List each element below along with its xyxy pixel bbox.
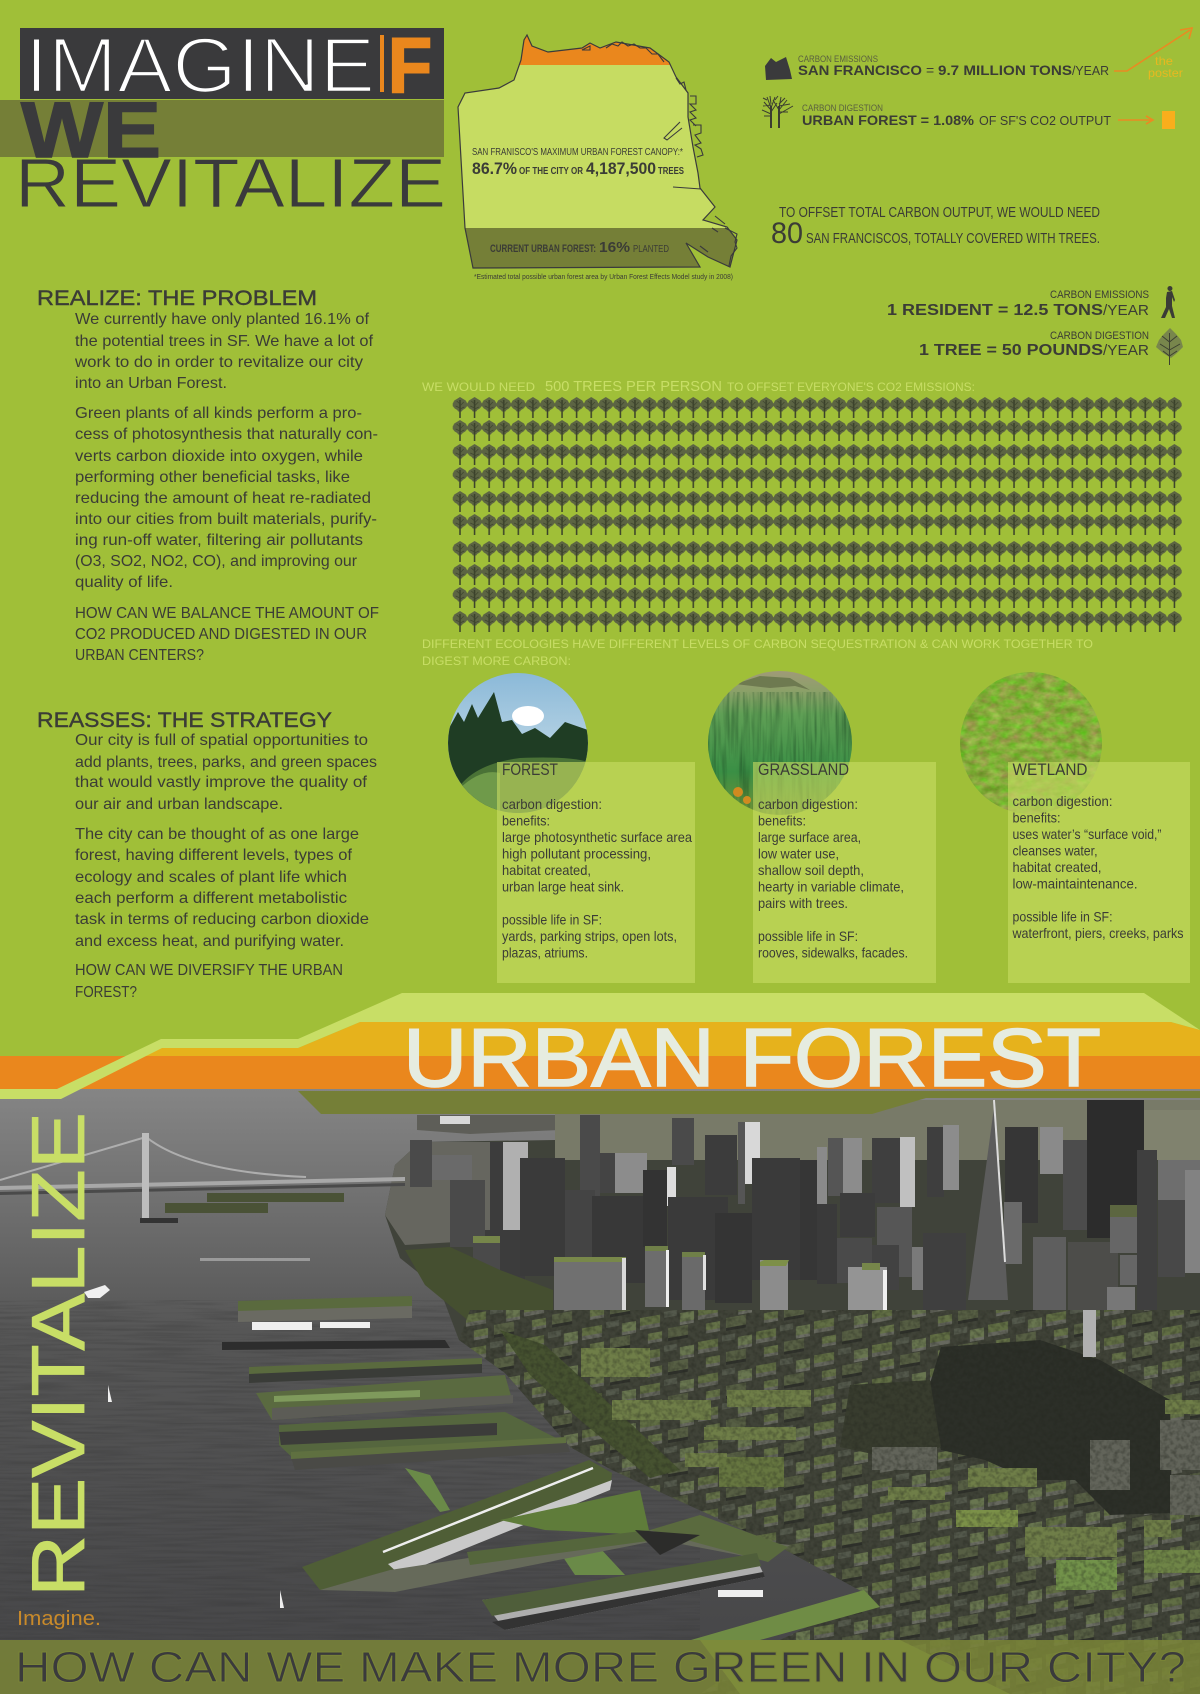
panel body text: high pollutant processing,: [502, 846, 651, 862]
banner: Urban Forest: [0, 993, 1200, 1114]
panel body text: [502, 796, 692, 960]
body text: realize: (O3, SO2, NO2, CO), and improving our: [75, 553, 358, 570]
olive band: [0, 1640, 1200, 1694]
digestion value: [802, 112, 1111, 128]
digestion caption: CARBON DIGESTION: [802, 103, 883, 114]
body text: reasses: our air and urban landscape.: [75, 796, 283, 813]
chart: grid of 500 trees: [453, 397, 1182, 632]
heading: reasses: REASSES: THE STRATEGY: [37, 709, 332, 732]
the poster label: poster: [1148, 66, 1183, 80]
body text: realize: We currently have only planted 16.1% of: [75, 311, 370, 328]
icon: San Francisco silhouette: [765, 57, 792, 80]
title word F: F: [388, 21, 432, 109]
icon: bare trees: [762, 96, 793, 128]
body text: reasses: each perform a different metabolistic: [75, 890, 347, 907]
panel body text: large photosynthetic surface area: [502, 829, 692, 845]
title dark box: [20, 28, 444, 99]
panel: wetland: [1008, 760, 1190, 983]
panel body text: pairs with trees.: [758, 895, 848, 911]
panel body text: urban large heat sink.: [502, 878, 624, 894]
olive band behind WE: [0, 100, 444, 157]
pale rooftops: [872, 1420, 1200, 1515]
heading: different ecologies: [422, 637, 1093, 668]
city land base: [385, 1114, 1200, 1694]
caption: Imagine: Imagine.: [17, 1608, 101, 1630]
body text: reasses: ecology and scales of plant life which: [75, 869, 347, 886]
map stat: 86.7 percent: OF THE CITY OR: [519, 166, 584, 177]
body text: realize: performing other beneficial tasks, like: [75, 469, 350, 486]
body text: reasses: The city can be thought of as one large: [75, 826, 359, 843]
stat: 1 tree: CARBON DIGESTION: [1050, 330, 1149, 342]
panel body text: rooves, sidewalks, facades.: [758, 944, 908, 960]
emissions value: [798, 62, 1109, 78]
map stat: current urban forest: CURRENT URBAN FOREST:: [490, 243, 596, 255]
panel body text: cleanses water,: [1012, 842, 1098, 858]
arrow to small rectangle: [1118, 116, 1153, 124]
stat: San Francisco carbon emissions: [765, 28, 1192, 80]
callout: 80 San Franciscos: SAN FRANCISCOS, TOTALLY COVERED WITH TREES.: [806, 230, 1100, 247]
panel body text: hearty in variable climate,: [758, 878, 904, 894]
body text: reasses: FOREST?: [75, 984, 137, 1001]
body text: realize: ing run-off water, filtering air pollutants: [75, 532, 363, 549]
map footnote: *Estimated total possible urban forest area by Urban Forest Effects Model study in 2008): [474, 274, 733, 281]
panel body text: benefits:: [502, 812, 550, 828]
orange stripe: [0, 1056, 1200, 1089]
panel body text: low-maintaintenance.: [1012, 876, 1138, 892]
vertical title: Revitalize: REVITALIZE: [16, 1112, 100, 1597]
map stat: current urban forest: 16%: [599, 239, 630, 256]
stat: 1 tree: /YEAR: [1103, 342, 1149, 359]
panel body text: carbon digestion:: [758, 796, 858, 812]
stat: 1 tree: 1 TREE = 50 POUNDS: [919, 342, 1103, 359]
text column: realize the problem: [37, 287, 379, 664]
wetland patches in water: [405, 1468, 625, 1575]
emissions value: /YEAR: [1072, 63, 1109, 78]
bay water: [0, 1089, 1200, 1694]
panel body text: carbon digestion:: [502, 796, 602, 812]
lit low towers: [554, 1258, 626, 1310]
emissions value: SAN FRANCISCO: [798, 62, 922, 78]
shaded trees west of hill: [840, 1380, 941, 1460]
panel body text: waterfront, piers, creeks, parks: [1012, 925, 1184, 941]
map pier details: [582, 42, 737, 266]
panel body text: plazas, atriums.: [502, 944, 588, 960]
city haze behind towers: [555, 1100, 1200, 1160]
body text: reasses: Our city is full of spatial opportunities to: [75, 732, 368, 749]
body text: reasses: HOW CAN WE DIVERSIFY THE URBAN: [75, 962, 343, 979]
body text: realize: into our cities from built materials, purify-: [75, 511, 377, 528]
body text: realize: URBAN CENTERS?: [75, 647, 204, 664]
Coit tower: [1083, 1310, 1096, 1357]
panel title: WETLAND: [1012, 760, 1088, 779]
photo: aerial view of San Francisco waterfront with green roofs: [0, 1089, 1200, 1694]
piers along the waterfront: [222, 1296, 570, 1470]
map: San Francisco urban forest canopy: [450, 30, 750, 281]
title word WE: WE: [21, 85, 161, 174]
the poster label: [1148, 54, 1183, 80]
panel background: [497, 762, 695, 983]
arrow to the poster: [1114, 28, 1192, 71]
body text: reasses: and excess heat, and purifying water.: [75, 933, 344, 950]
olive stripe: [298, 1091, 1200, 1114]
banner title: URBAN FOREST: [403, 1011, 1101, 1104]
panel body text: low water use,: [758, 846, 839, 862]
bottom band with question: [0, 1640, 1200, 1694]
body text: reasses: task in terms of reducing carbon dioxide: [75, 911, 369, 928]
body text: reasses: [75, 732, 377, 1001]
stat: 1 tree: [919, 328, 1183, 365]
heading: 500 trees per person: 500 TREES PER PERSON: [545, 378, 722, 395]
panel body text: habitat created,: [502, 862, 591, 878]
stat: urban forest carbon digestion: [762, 96, 1175, 129]
water ripples: [0, 1300, 700, 1640]
heading: different ecologies: DIFFERENT ECOLOGIES HAVE DIFFERENT LEVELS OF CARBON SEQUESTRATION & CAN WORK TOGETHER TO: [422, 637, 1093, 651]
map zones clipped to city shape: [458, 36, 736, 268]
map stat: 86.7 percent: [472, 159, 684, 178]
map label: maximum canopy: SAN FRANISCO'S MAXIMUM URBAN FOREST CANOPY:*: [472, 147, 683, 158]
panel body text: shallow soil depth,: [758, 862, 864, 878]
digestion value: OF SF'S CO2 OUTPUT: [979, 113, 1111, 128]
body text: realize: cess of photosynthesis that naturally con-: [75, 426, 378, 443]
callout: 80 San Franciscos: [771, 204, 1100, 250]
map stat: 86.7 percent: 86.7%: [472, 159, 517, 178]
Transamerica pyramid: [968, 1100, 1008, 1300]
body text: realize: work to do in order to revitalize our city: [74, 354, 363, 371]
the poster label: the: [1155, 54, 1173, 68]
waterfront park trees: [405, 1247, 553, 1322]
body text: reasses: that would vastly improve the quality of: [75, 774, 368, 791]
stat: 1 resident: [887, 286, 1175, 319]
stat: 1 resident: CARBON EMISSIONS: [1050, 289, 1149, 301]
title word REVITALIZE: REVITALIZE: [15, 144, 446, 222]
body text: realize: verts carbon dioxide into oxygen, while: [75, 448, 363, 465]
body text: realize: CO2 PRODUCED AND DIGESTED IN OUR: [75, 626, 367, 643]
text column: reasses the strategy: [37, 709, 377, 1001]
large V-shaped pier with green roof: [302, 1460, 790, 1592]
digestion value: URBAN FOREST = 1.08%: [802, 112, 975, 128]
body text: reasses: add plants, trees, parks, and green spaces: [75, 754, 377, 771]
panel body text: large surface area,: [758, 829, 861, 845]
bottom right lawns: [691, 1590, 880, 1640]
map stat: current urban forest: [490, 239, 669, 256]
body text: realize: quality of life.: [75, 574, 173, 591]
body text: reasses: forest, having different levels, types of: [75, 847, 353, 864]
waterfront low buildings: [385, 1142, 490, 1245]
emissions caption: CARBON EMISSIONS: [798, 54, 878, 65]
panel body text: yards, parking strips, open lots,: [502, 928, 677, 944]
light green stripe: [0, 993, 1200, 1099]
stat: 1 resident: /YEAR: [1103, 302, 1149, 319]
icon: single tree: [1156, 328, 1183, 365]
emissions value: 9.7 MILLION TONS: [938, 62, 1072, 78]
panel title: FOREST: [502, 760, 558, 779]
body text: realize: into an Urban Forest.: [75, 375, 227, 392]
downtown low rise blocks with green roofs: [466, 1310, 1200, 1640]
tree lined promenade: [500, 1330, 680, 1478]
panel body text: habitat created,: [1012, 859, 1102, 875]
body text: realize: reducing the amount of heat re-radiated: [75, 490, 371, 507]
title word IMAGINE: IMAGINE: [25, 21, 375, 109]
panel body text: uses water’s “surface void,”: [1012, 826, 1162, 842]
panel: forest: [497, 760, 695, 983]
map outline with piers: [458, 35, 737, 268]
stat: 1 resident: 1 RESIDENT = 12.5 TONS: [887, 302, 1103, 319]
question text: HOW CAN WE MAKE MORE GREEN IN OUR CITY?: [15, 1643, 1186, 1692]
photo: wetland circle: [960, 672, 1102, 814]
panel title: GRASSLAND: [758, 760, 849, 779]
yellow proportion rectangle: [1162, 111, 1175, 129]
panel: grassland: [753, 760, 936, 983]
map stat: 86.7 percent: 4,187,500: [586, 159, 656, 178]
photo: grassland circle: [708, 671, 852, 815]
boats and sails: [84, 1285, 763, 1608]
callout: 80 San Franciscos: 80: [771, 217, 803, 250]
heading: realize: REALIZE: THE PROBLEM: [37, 287, 317, 310]
panel body text: benefits:: [758, 812, 806, 828]
panel body text: possible life in SF:: [1012, 908, 1112, 924]
panel background: [1008, 762, 1190, 983]
skyscrapers back row: [410, 1100, 1200, 1238]
green roof blocks: [581, 1348, 1200, 1590]
panel body text: carbon digestion:: [1012, 793, 1112, 809]
photo: forest circle: [448, 673, 588, 813]
far shore: [417, 1115, 560, 1134]
body text: realize: HOW CAN WE BALANCE THE AMOUNT OF: [75, 605, 379, 622]
body text: realize: Green plants of all kinds perform a pro-: [75, 405, 362, 422]
panel body text: benefits:: [1012, 810, 1060, 826]
panel body text: [758, 796, 908, 960]
Bay Bridge: [0, 1133, 405, 1261]
body text: realize: [74, 311, 379, 664]
icon: walking person: [1161, 286, 1175, 318]
heading: different ecologies: DIGEST MORE CARBON:: [422, 654, 571, 668]
panel background: [753, 762, 936, 983]
yellow stripe: [125, 1022, 1200, 1056]
skyscrapers front row: [450, 1100, 1200, 1357]
body text: realize: the potential trees in SF. We have a lot of: [75, 333, 374, 350]
title block: Imagine If We Revitalize: [0, 21, 446, 222]
map stat: 86.7 percent: TREES: [658, 166, 684, 177]
title orange I divider: [380, 35, 384, 92]
emissions value: =: [926, 62, 934, 78]
heading: 500 trees per person: [422, 378, 975, 395]
panel body text: [1012, 793, 1184, 941]
dark hill forest: [925, 1340, 1172, 1515]
map stat: current urban forest: PLANTED: [633, 244, 669, 255]
panel body text: possible life in SF:: [502, 912, 602, 928]
callout: 80 San Franciscos: TO OFFSET TOTAL CARBON OUTPUT, WE WOULD NEED: [779, 204, 1100, 221]
heading: 500 trees per person: WE WOULD NEED: [422, 382, 535, 394]
fine grain on low rise city: [461, 1310, 1200, 1640]
lower pier: [482, 1553, 765, 1630]
panel body text: possible life in SF:: [758, 928, 858, 944]
heading: 500 trees per person: TO OFFSET EVERYONE'S CO2 EMISSIONS:: [727, 382, 975, 394]
